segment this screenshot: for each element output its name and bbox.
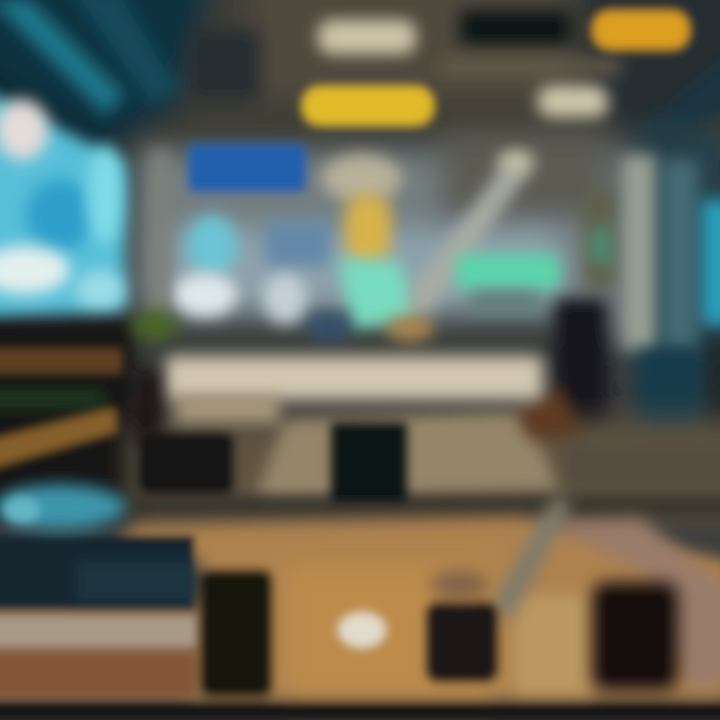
light: white top centre <box>318 20 416 54</box>
blue cabinet <box>638 348 704 442</box>
figure: raised arm <box>404 162 530 318</box>
left shelf with plants <box>0 309 179 518</box>
chair: front right <box>592 582 678 690</box>
ceiling beams <box>0 0 720 170</box>
white cup on desk <box>338 612 386 648</box>
standing person <box>584 190 614 290</box>
front desk surface <box>110 495 720 700</box>
light: white right <box>538 86 608 118</box>
front left objects <box>0 485 200 700</box>
figure: hand on table <box>386 314 434 342</box>
blue sign <box>188 144 306 192</box>
figure: hat <box>322 154 402 202</box>
back screens and figure <box>150 150 560 342</box>
ceiling lights <box>302 10 690 126</box>
right side columns and person <box>554 155 720 450</box>
chair: front left <box>200 570 272 696</box>
bottom dark band <box>0 702 720 720</box>
chair: left back <box>138 432 234 494</box>
middle wall band <box>130 130 720 370</box>
chair: centre <box>330 422 408 502</box>
floor and back table <box>120 356 720 520</box>
light: yellow centre <box>302 86 434 126</box>
cup: front centre <box>426 602 498 682</box>
ceiling <box>0 0 720 210</box>
light: yellow top right <box>592 10 690 50</box>
figure: shirt <box>338 258 420 328</box>
green screen <box>456 254 560 290</box>
conference table <box>165 356 543 400</box>
wall screen left <box>0 88 125 322</box>
figure: face <box>345 195 391 263</box>
chairs and cups in foreground <box>200 570 678 696</box>
